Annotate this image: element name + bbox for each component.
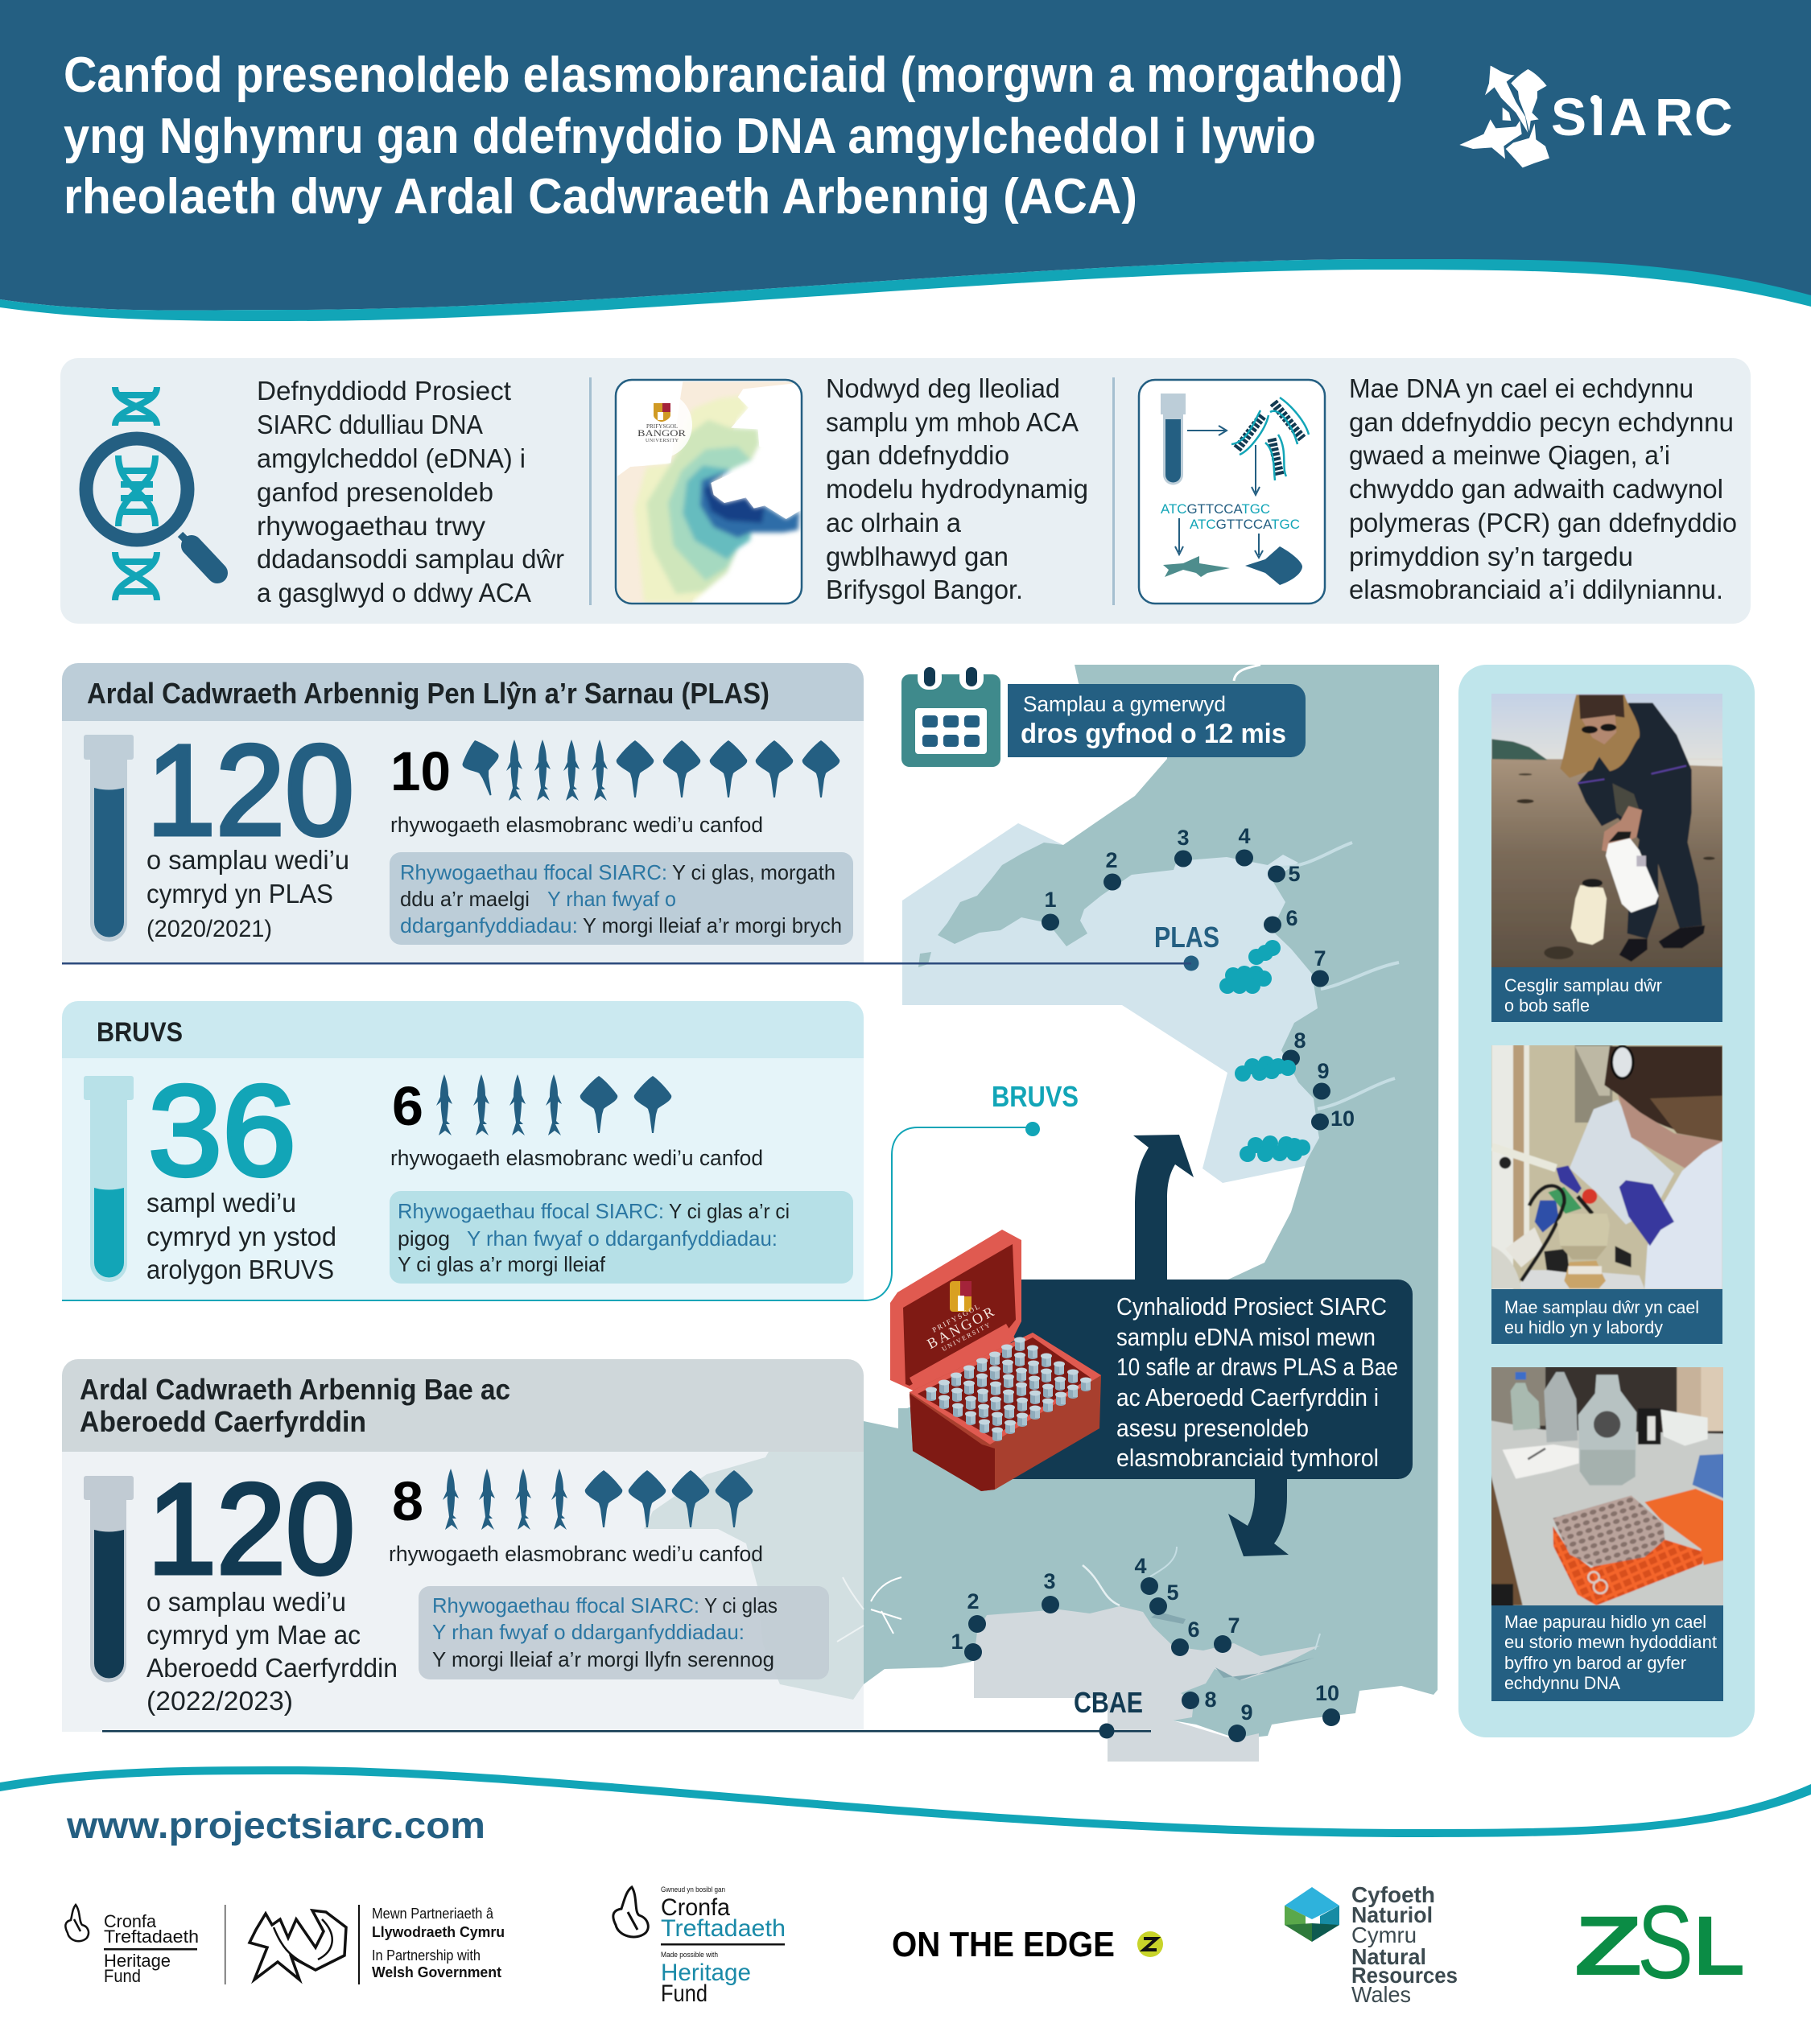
callout: species list: Y ci glas a’r ci xyxy=(669,1199,790,1223)
stat: 120 samples: 120 xyxy=(147,1457,355,1601)
callout: species list: ddarganfyddiadau: xyxy=(400,913,578,938)
heading: Aberoedd Caerfyrddin xyxy=(80,1405,366,1438)
logo: Bangor University on lid: PRIFYSGOL xyxy=(930,1301,982,1334)
sampling sites: PLAS: 8 xyxy=(1293,1028,1306,1053)
text: eDNA methods xyxy=(257,376,564,608)
stat: 120 samples: o samplau wedi’u xyxy=(146,845,349,875)
panel: PLAS xyxy=(62,663,1191,964)
stat: 10 species xyxy=(390,740,763,837)
heading: BRUVS xyxy=(97,1017,183,1048)
callout: 12 months: Samplau a gymerwyd xyxy=(1023,692,1226,716)
stat: 36 samples xyxy=(146,1058,336,1284)
icons: species xyxy=(457,736,839,801)
logo: Heritage Fund and Welsh Government xyxy=(65,1905,505,1986)
photo: water collection xyxy=(1489,692,1726,971)
callout: species list: Rhywogaethau ffocal SIARC: xyxy=(398,1199,664,1223)
icons: species xyxy=(436,1074,671,1135)
illustration: red sample box xyxy=(890,1230,1101,1491)
logo: Heritage Fund: Treftadaeth xyxy=(661,1915,786,1942)
logo: Heritage Fund and Welsh Government: Welsh Government xyxy=(372,1964,501,1980)
label: BRUVS with connector: BRUVS xyxy=(992,1080,1079,1113)
text: lab process: elasmobranciaid a’i ddilyniannu. xyxy=(1349,575,1723,604)
callout: monthly sampling: ac Aberoedd Caerfyrddin i xyxy=(1116,1383,1379,1411)
panel: fieldwork photos xyxy=(1458,665,1755,1737)
label: BRUVS with connector xyxy=(62,1080,1079,1300)
sampling sites: PLAS: 4 xyxy=(1238,824,1251,848)
logo: Heritage Fund and Welsh Government: Cronfa xyxy=(104,1911,157,1931)
sampling sites: CBAE xyxy=(951,1554,1340,1742)
text: sampling locations: samplu ym mhob ACA xyxy=(826,407,1079,437)
logo: Bangor crest: UNIVERSITY xyxy=(646,439,679,443)
logo: Bangor University on lid: UNIVERSITY xyxy=(941,1321,992,1353)
title: Canfod presenoldeb elasmobranciaid (morgwn a morgathod) xyxy=(64,47,1403,103)
sampling sites: PLAS: 1 xyxy=(1044,888,1057,912)
caption xyxy=(1491,967,1722,1022)
diagram: DNA extraction: ATCGTTCCATGC xyxy=(1190,517,1300,532)
text: eDNA methods: ganfod presenoldeb xyxy=(257,477,493,507)
stat: 10 species: 10 xyxy=(390,740,451,802)
stat: 8 species: rhywogaeth elasmobranc wedi’u canfod xyxy=(389,1542,763,1566)
stat: 120 samples: cymryd yn PLAS xyxy=(146,879,333,909)
sampling sites: PLAS: 9 xyxy=(1317,1059,1330,1083)
logo: Heritage Fund and Welsh Government: Llywodraeth Cymru xyxy=(372,1924,505,1940)
callout: species list: ddu a’r maelgi xyxy=(400,887,530,911)
logo: Natural Resources Wales: Cymru xyxy=(1351,1922,1417,1947)
heading: Ardal Cadwraeth Arbennig Pen Llŷn a’r Sarnau (PLAS) xyxy=(87,677,769,710)
stat: 10 species: rhywogaeth elasmobranc wedi’u canfod xyxy=(390,813,763,837)
stat: 6 species: rhywogaeth elasmobranc wedi’u canfod xyxy=(390,1146,763,1170)
stat: 120 samples xyxy=(146,1457,398,1716)
callout: monthly sampling: Cynhaliodd Prosiect SIARC xyxy=(1116,1292,1387,1321)
logo: Natural Resources Wales: Cyfoeth xyxy=(1351,1882,1435,1907)
logo: ZSL xyxy=(1574,1883,1745,2001)
sampling sites: CBAE: 4 xyxy=(1134,1554,1147,1578)
text: sampling locations: modelu hydrodynamig xyxy=(826,474,1088,504)
stat: 36 samples: 36 xyxy=(148,1058,296,1202)
label: CBAE xyxy=(102,1686,1151,1738)
sampling sites: PLAS: 10 xyxy=(1330,1106,1355,1131)
icon: test tube xyxy=(84,1076,134,1282)
callout: monthly sampling: samplu eDNA misol mewn xyxy=(1116,1323,1376,1351)
text: lab process: polymeras (PCR) gan ddefnyddio xyxy=(1349,508,1737,538)
panel: Carmarthen Bay SAC xyxy=(62,1359,864,1732)
logo: Bangor crest: PRIFYSGOL xyxy=(646,423,678,430)
stat: 8 species xyxy=(389,1470,763,1566)
logo: Natural Resources Wales: Natural xyxy=(1351,1944,1426,1969)
sampling sites: CBAE: 8 xyxy=(1204,1688,1217,1712)
sampling sites: CBAE: 7 xyxy=(1227,1613,1240,1638)
logo: Bangor crest xyxy=(637,403,686,443)
text: lab process: Mae DNA yn cael ei echdynnu xyxy=(1349,373,1693,403)
caption: eu storio mewn hydoddiant xyxy=(1504,1632,1717,1652)
logo: Heritage Fund: Fund xyxy=(661,1980,707,2007)
sampling sites: CBAE: 9 xyxy=(1240,1700,1253,1725)
callout: monthly sampling: elasmobranciaid tymhorol xyxy=(1116,1444,1379,1472)
stat: 6 species: 6 xyxy=(392,1075,423,1137)
logo: Heritage Fund and Welsh Government: Fund xyxy=(104,1966,141,1986)
callout: species list: Y rhan fwyaf o xyxy=(547,887,676,911)
sampling sites: CBAE: 10 xyxy=(1315,1681,1339,1705)
caption: Mae samplau dŵr yn cael xyxy=(1504,1297,1699,1317)
logo: Heritage Fund and Welsh Government: Heritage xyxy=(104,1951,171,1971)
text: sampling locations xyxy=(826,373,1088,604)
callout: species list: pigog xyxy=(398,1226,450,1251)
sampling sites: CBAE: 5 xyxy=(1166,1580,1179,1605)
heading xyxy=(80,1373,510,1438)
vials xyxy=(926,1337,1091,1441)
logo: Heritage Fund and Welsh Government: In Partnership with xyxy=(372,1947,481,1964)
callout: species list: Y ci glas, morgath xyxy=(672,860,835,884)
sampling sites: PLAS: 7 xyxy=(1314,946,1326,970)
icons: species xyxy=(443,1469,753,1530)
BRUVS deployment clusters xyxy=(1219,940,1310,1162)
callout: monthly sampling xyxy=(998,1280,1413,1479)
stat: 120 samples xyxy=(146,718,354,942)
title xyxy=(64,47,1403,225)
sampling sites: PLAS: 6 xyxy=(1285,906,1298,930)
logo: Natural Resources Wales xyxy=(1285,1882,1458,2007)
callout: species list: Rhywogaethau ffocal SIARC: xyxy=(432,1593,699,1617)
title: yng Nghymru gan ddefnyddio DNA amgylcheddol i lywio xyxy=(64,109,1316,164)
label: PLAS: PLAS xyxy=(1154,921,1219,954)
sampling sites: CBAE: 3 xyxy=(1043,1569,1056,1593)
stat: 120 samples: cymryd ym Mae ac xyxy=(146,1620,361,1650)
diagram: DNA extraction xyxy=(1139,380,1325,604)
stat: 8 species: 8 xyxy=(392,1470,423,1532)
footer wave xyxy=(0,1766,1811,1837)
callout: species list: Y morgi lleiaf a’r morgi brych xyxy=(583,913,842,938)
logo: On the Edge: ON THE EDGE xyxy=(892,1925,1115,1964)
logo: Heritage Fund xyxy=(613,1885,786,2007)
header band xyxy=(0,0,1811,321)
text: sampling locations: Nodwyd deg lleoliad xyxy=(826,373,1060,403)
caption: o bob safle xyxy=(1504,995,1590,1016)
sampling sites: CBAE: 1 xyxy=(951,1630,963,1654)
heading: Ardal Cadwraeth Arbennig Bae ac xyxy=(80,1373,510,1406)
callout: species list: Rhywogaethau ffocal SIARC: xyxy=(400,860,667,884)
map: Wales coast xyxy=(864,665,1439,1762)
callout: species list: Y ci glas xyxy=(704,1593,778,1617)
callout: species list: Y ci glas a’r morgi lleiaf xyxy=(398,1252,606,1276)
map: hydrodynamic model xyxy=(616,380,805,604)
label: CBAE: CBAE xyxy=(1074,1686,1143,1719)
text: lab process: gwaed a meinwe Qiagen, a’i xyxy=(1349,440,1670,470)
callout: species list xyxy=(390,852,853,945)
caption: Mae papurau hidlo yn cael xyxy=(1504,1612,1706,1632)
panel: intro xyxy=(60,358,1751,624)
panel: BRUVS xyxy=(62,1001,864,1300)
photo: lab filtering xyxy=(1489,1042,1726,1292)
stat: 36 samples: sampl wedi’u xyxy=(146,1188,296,1218)
text: sampling locations: gwblhawyd gan xyxy=(826,542,1009,571)
arrow: up to PLAS xyxy=(1133,1135,1194,1288)
logo: SIARC: SIARC xyxy=(1551,87,1733,146)
logo: Natural Resources Wales: Resources xyxy=(1351,1963,1458,1988)
text: sampling locations: ac olrhain a xyxy=(826,508,962,538)
diagram: DNA extraction: ATCGTTCCATGC xyxy=(1161,501,1270,517)
callout: 12 months xyxy=(1008,684,1306,757)
logo: ZSL: S xyxy=(1637,1883,1693,2001)
calendar icon xyxy=(901,666,1000,767)
callout: species list: Y morgi lleiaf a’r morgi llyfn serennog xyxy=(432,1647,774,1671)
label: PLAS xyxy=(62,921,1219,970)
callout: monthly sampling: 10 safle ar draws PLAS a Bae xyxy=(1116,1353,1398,1381)
title: rheolaeth dwy Ardal Cadwraeth Arbennig (ACA) xyxy=(64,169,1137,225)
sampling sites: PLAS xyxy=(1042,824,1355,1162)
logo: Bangor University on lid: BANGOR xyxy=(924,1302,999,1352)
callout: 12 months: dros gyfnod o 12 mis xyxy=(1021,719,1286,749)
sampling sites: PLAS: 5 xyxy=(1288,862,1301,886)
caption: byffro yn barod ar gyfer xyxy=(1504,1653,1686,1673)
text: eDNA methods: amgylcheddol (eDNA) i xyxy=(257,443,526,473)
text: sampling locations: gan ddefnyddio xyxy=(826,440,1009,470)
icon: test tube xyxy=(84,1476,134,1682)
stat: 120 samples: o samplau wedi’u xyxy=(146,1587,346,1617)
website url: www.projectsiarc.com xyxy=(66,1804,485,1846)
caption: echdynnu DNA xyxy=(1504,1673,1620,1693)
icon: DNA magnifier xyxy=(86,387,217,600)
text: eDNA methods: Defnyddiodd Prosiect xyxy=(257,376,511,406)
logo: Heritage Fund: Cronfa xyxy=(661,1894,730,1921)
logo: Bangor crest: BANGOR xyxy=(637,427,686,439)
stat: 6 species xyxy=(390,1075,763,1170)
logo: Heritage Fund: Heritage xyxy=(661,1960,751,1986)
callout: species list: Y rhan fwyaf o ddarganfyddiadau: xyxy=(432,1620,745,1644)
text: eDNA methods: SIARC ddulliau DNA xyxy=(257,410,483,439)
caption xyxy=(1491,1605,1723,1701)
logo: Bangor University on lid xyxy=(922,1281,1001,1358)
sampling sites: CBAE: 2 xyxy=(967,1589,980,1613)
logo: Heritage Fund and Welsh Government: Treftadaeth xyxy=(104,1927,199,1947)
text: sampling locations: Brifysgol Bangor. xyxy=(826,575,1023,604)
callout: species list: Y rhan fwyaf o ddarganfyddiadau: xyxy=(467,1226,778,1251)
stat: 36 samples: arolygon BRUVS xyxy=(146,1255,334,1284)
text: lab process: chwyddo gan adwaith cadwynol xyxy=(1349,474,1723,504)
icon: test tube xyxy=(84,735,134,942)
text: eDNA methods: ddadansoddi samplau dŵr xyxy=(257,544,564,574)
logo: Heritage Fund: Made possible with xyxy=(661,1951,718,1959)
text: eDNA methods: rhywogaethau trwy xyxy=(257,511,485,541)
text: eDNA methods: a gasglwyd o ddwy ACA xyxy=(257,578,531,608)
callout: monthly sampling: asesu presenoldeb xyxy=(1116,1414,1309,1442)
text: lab process: primyddion sy’n targedu xyxy=(1349,542,1633,571)
logo: ZSL: Z xyxy=(1574,1899,1643,1993)
logo: Natural Resources Wales: Wales xyxy=(1351,1982,1411,2007)
text: lab process xyxy=(1349,373,1737,604)
stat: 120 samples: 120 xyxy=(146,718,354,862)
caption xyxy=(1491,1289,1722,1344)
text: lab process: gan ddefnyddio pecyn echdynnu xyxy=(1349,407,1734,437)
logo: Heritage Fund and Welsh Government: Mewn Partneriaeth â xyxy=(372,1906,494,1922)
stat: 120 samples: Aberoedd Caerfyrddin xyxy=(146,1653,398,1683)
arrow: down to CBAE xyxy=(1228,1477,1289,1556)
photo: stored filter papers xyxy=(1489,1364,1726,1611)
stat: 120 samples: (2020/2021) xyxy=(146,916,272,942)
logo: ZSL: L xyxy=(1693,1899,1745,1993)
stat: 120 samples: (2022/2023) xyxy=(146,1686,293,1716)
logo: Natural Resources Wales: Naturiol xyxy=(1351,1902,1433,1927)
sampling sites: PLAS: 2 xyxy=(1105,848,1118,872)
caption: Cesglir samplau dŵr xyxy=(1504,975,1662,995)
sampling sites: CBAE: 6 xyxy=(1187,1617,1200,1642)
caption: eu hidlo yn y labordy xyxy=(1504,1317,1663,1337)
logo: SIARC xyxy=(1459,66,1733,167)
logo: Heritage Fund: Gwneud yn bosibl gan xyxy=(661,1885,725,1894)
callout: species list xyxy=(419,1586,829,1679)
callout: species list xyxy=(390,1191,853,1284)
stat: 36 samples: cymryd yn ystod xyxy=(146,1222,336,1251)
sampling sites: PLAS: 3 xyxy=(1177,826,1190,850)
